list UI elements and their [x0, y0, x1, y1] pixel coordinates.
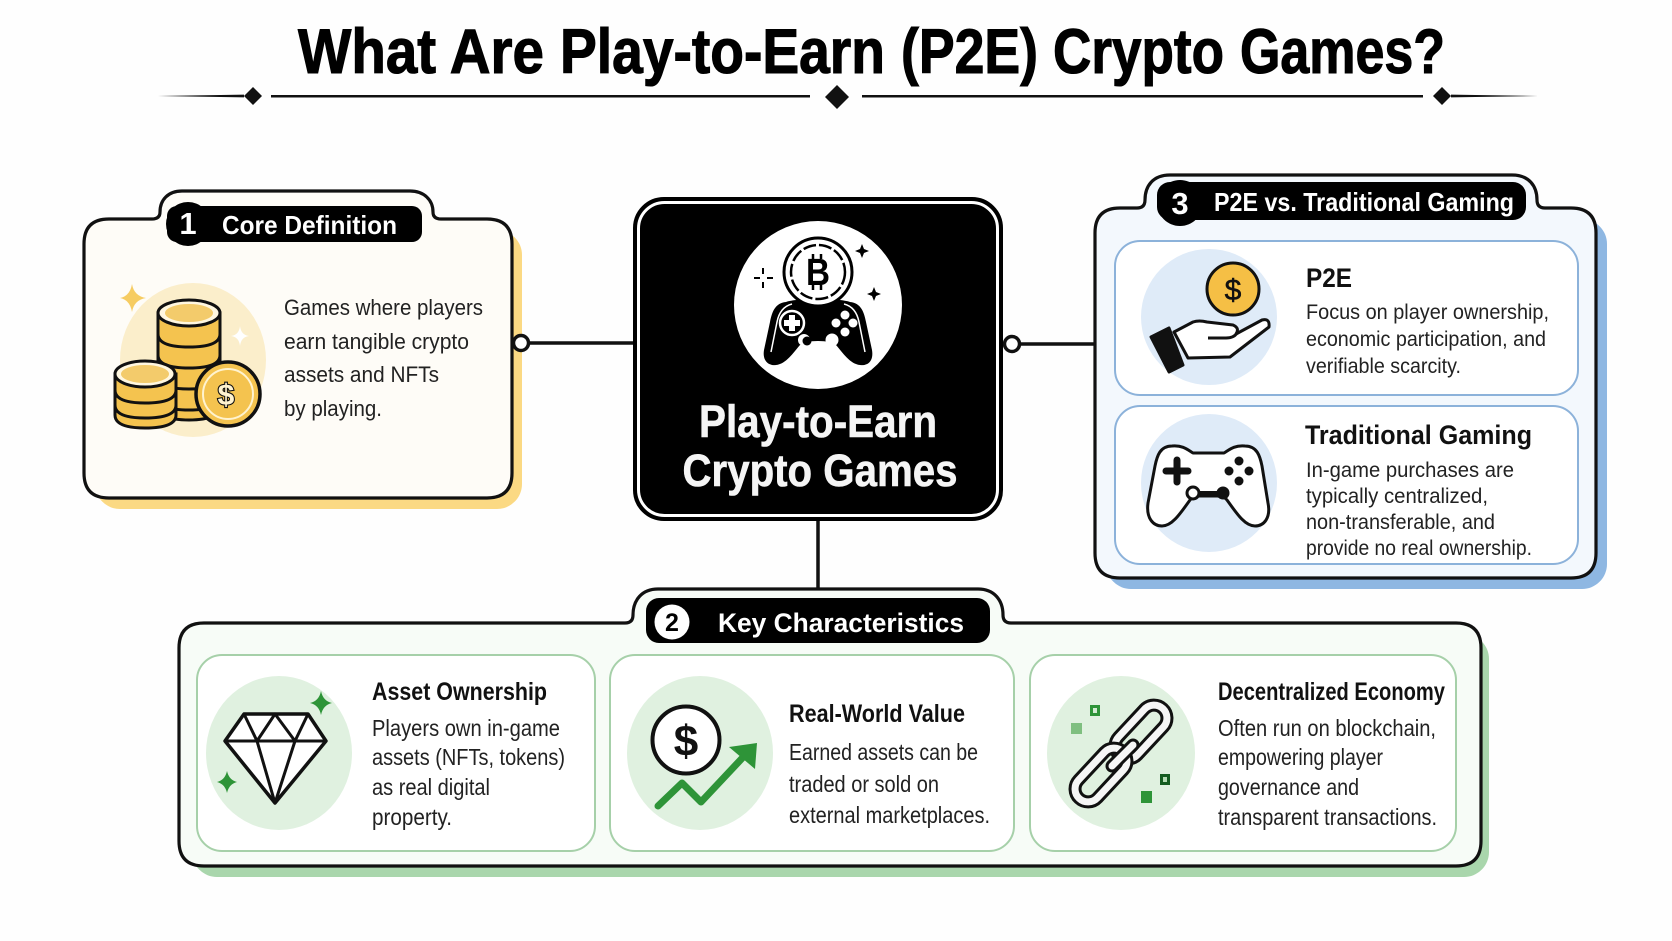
card: P2E — [1115, 241, 1578, 395]
title: What Are — [298, 17, 544, 87]
text: decentralized economy: Often run on blockchain, — [1218, 715, 1436, 741]
text: asset ownership — [372, 678, 565, 830]
text: P2E: verifiable scarcity. — [1306, 355, 1461, 378]
text: definition: Games where players — [284, 295, 483, 320]
title — [298, 17, 1445, 87]
text: P2E — [1306, 263, 1549, 378]
text: real-world value: external marketplaces. — [789, 802, 990, 828]
heading: comparison: 3 — [1171, 186, 1189, 221]
text: hub title — [682, 396, 958, 496]
card: traditional gaming — [1115, 406, 1578, 564]
text: definition: by playing. — [284, 396, 382, 421]
text: definition: earn tangible crypto — [284, 329, 469, 354]
icon: game controller — [1141, 414, 1277, 552]
connector: definition to center — [514, 336, 634, 350]
text: real-world value: Earned assets can be — [789, 739, 978, 765]
text: real-world value — [789, 700, 990, 828]
text: decentralized economy: Decentralized Economy — [1218, 678, 1445, 706]
heading: core definition — [166, 202, 422, 246]
card: asset ownership — [197, 655, 595, 851]
title: Games? — [1240, 17, 1445, 87]
heading: key characteristics: 2 — [665, 609, 679, 637]
text: asset ownership: Players own in-game — [372, 715, 560, 741]
title: (P2E) — [901, 17, 1038, 87]
text: asset ownership: assets (NFTs, tokens) — [372, 744, 565, 770]
text: traditional gaming — [1305, 420, 1532, 560]
text: real-world value: Real-World Value — [789, 700, 965, 728]
text: decentralized economy: governance and — [1218, 774, 1359, 800]
connector: center to comparison — [1004, 336, 1096, 352]
heading: comparison — [1157, 180, 1526, 226]
icon: dollar and growth arrow — [627, 676, 773, 830]
panel: core definition — [84, 191, 522, 509]
icon: dollar and growth arrow: $ — [674, 717, 698, 766]
text: asset ownership: property. — [372, 804, 452, 830]
text: hub title: Crypto Games — [682, 445, 958, 496]
text: traditional gaming: In-game purchases are — [1306, 459, 1514, 482]
text: real-world value: traded or sold on — [789, 771, 939, 797]
text: traditional gaming: non-transferable, and — [1306, 511, 1495, 534]
icon: coin stacks: $ — [218, 379, 235, 412]
panel: P2E vs traditional gaming — [1095, 175, 1607, 589]
text: hub title: Play-to-Earn — [699, 396, 937, 447]
icon: hand with coin — [1141, 249, 1277, 385]
title: Crypto — [1053, 17, 1224, 87]
text: decentralized economy — [1218, 678, 1445, 830]
text: traditional gaming: Traditional Gaming — [1305, 420, 1532, 450]
text: definition: assets and NFTs — [284, 362, 439, 387]
icon: coin stacks — [115, 283, 266, 437]
icon: chain links — [1047, 676, 1195, 830]
text: traditional gaming: typically centralized, — [1306, 485, 1488, 508]
heading: core definition: Core Definition — [222, 210, 397, 240]
heading: key characteristics — [646, 598, 990, 643]
title: Play-to-Earn — [560, 17, 885, 87]
text: decentralized economy: empowering player — [1218, 744, 1383, 770]
text: decentralized economy: transparent transactions. — [1218, 804, 1437, 830]
text: P2E: Focus on player ownership, — [1306, 301, 1549, 324]
icon: hand with coin: $ — [1225, 274, 1242, 307]
text: P2E: economic participation, and — [1306, 328, 1546, 351]
card: real-world value — [610, 655, 1014, 851]
icon: diamond — [206, 676, 352, 830]
heading: key characteristics: Key Characteristics — [718, 608, 964, 638]
card: decentralized economy — [1030, 655, 1456, 851]
heading: core definition: 1 — [179, 206, 197, 241]
icon: bitcoin controller: B — [806, 252, 830, 294]
text: asset ownership: as real digital — [372, 774, 490, 800]
panel: key characteristics — [179, 589, 1489, 877]
connector: center to characteristics — [816, 520, 820, 590]
panel: center hub — [635, 199, 1001, 519]
heading: comparison: P2E vs. Traditional Gaming — [1214, 187, 1514, 217]
text: definition — [284, 295, 483, 421]
icon: bitcoin controller — [734, 221, 902, 389]
text: P2E: P2E — [1306, 263, 1352, 293]
text: traditional gaming: provide no real ownership. — [1306, 537, 1532, 560]
text: asset ownership: Asset Ownership — [372, 678, 547, 706]
